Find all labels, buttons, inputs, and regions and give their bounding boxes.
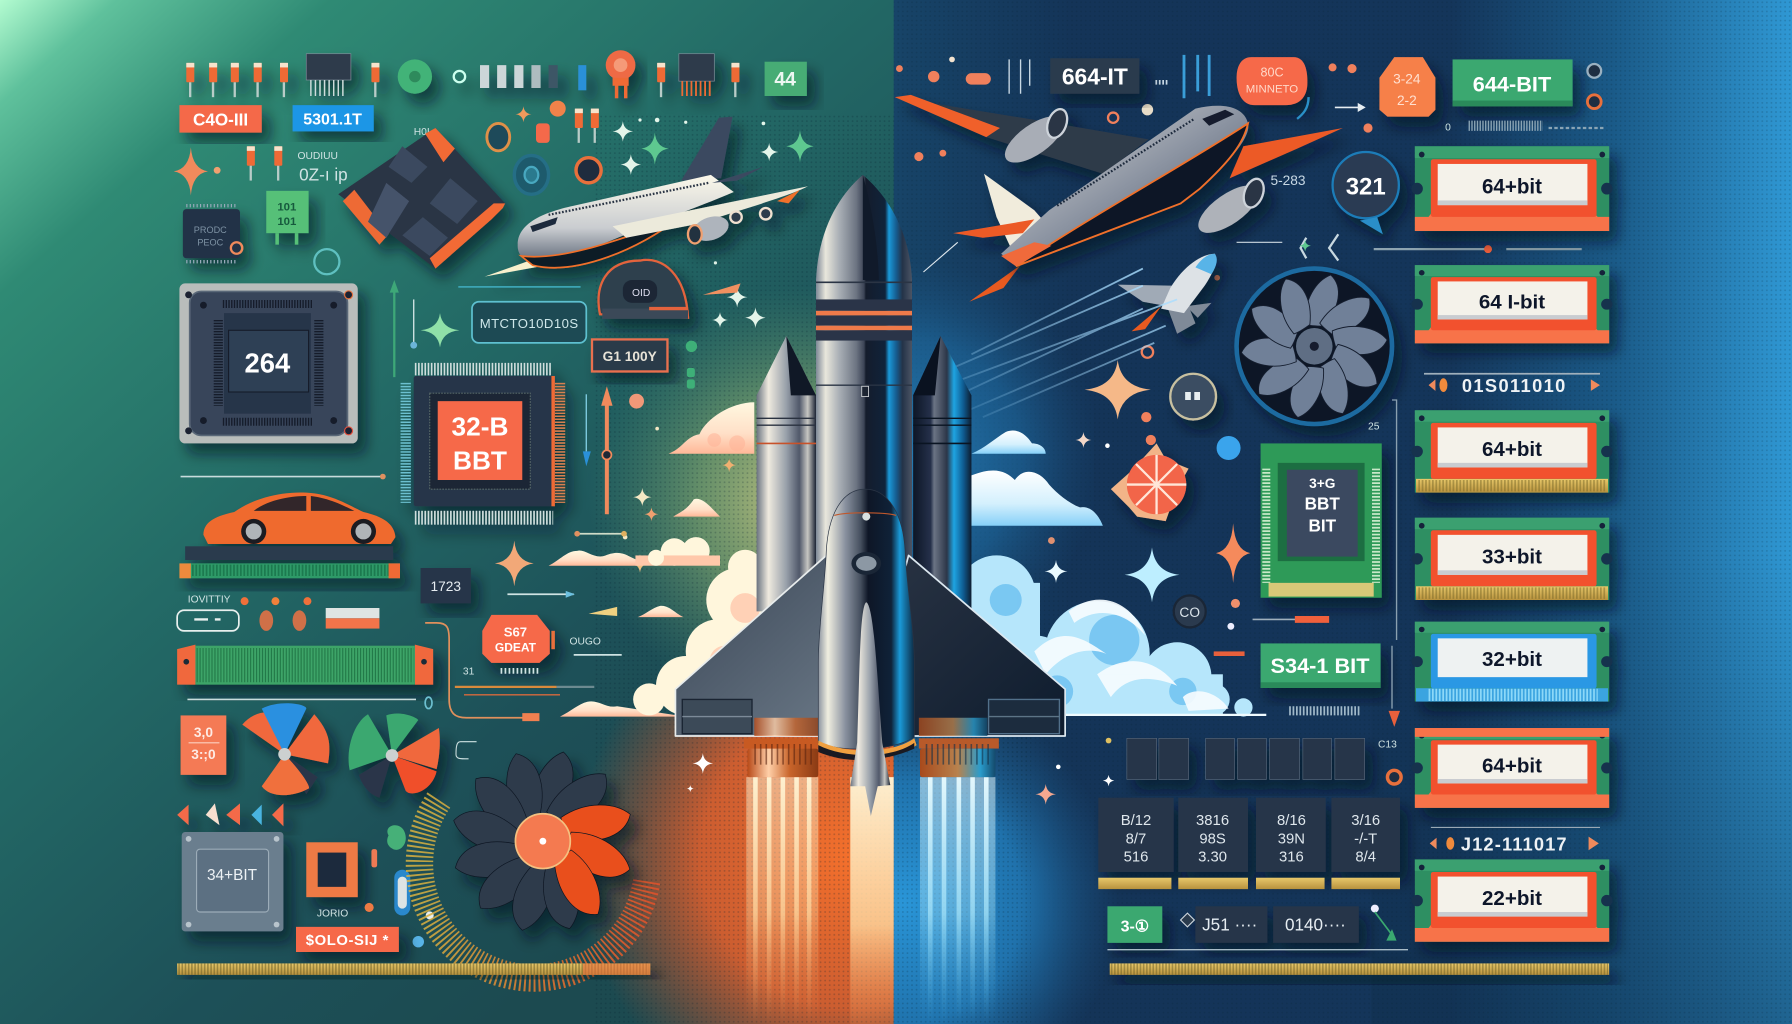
green chip 101: 101 xyxy=(277,201,297,213)
gold contacts xyxy=(1098,878,1400,889)
green square label 44: 44 xyxy=(774,69,796,91)
orange shard xyxy=(703,283,741,295)
RAM module 3: 64+bit xyxy=(1482,438,1542,461)
coral label 3-24 xyxy=(1379,57,1435,117)
center tail fin xyxy=(850,602,890,816)
coral label xyxy=(296,927,399,952)
circle 321 with speech tail xyxy=(1333,152,1399,234)
coral box: 3:;0 xyxy=(191,747,216,762)
label 664-IT: 664-IT xyxy=(1062,64,1128,90)
airplane right xyxy=(895,95,1343,266)
row of pill and dots: IOVITTIY xyxy=(188,594,231,605)
left nozzle xyxy=(744,738,821,777)
RAM module 2: 64 I-bit xyxy=(1479,292,1545,313)
small resistors xyxy=(247,146,282,181)
numeric memory blocks xyxy=(1098,798,1400,889)
green label 644-BIT: 644-BIT xyxy=(1473,71,1552,96)
dark labels: 0140···· xyxy=(1285,914,1346,934)
chip 1723: 1723 xyxy=(430,579,461,594)
rings xyxy=(1335,64,1606,133)
green square label 44 xyxy=(765,62,807,96)
large green RAM stick xyxy=(177,645,433,685)
gray chip 34+BIT: 34+BIT xyxy=(207,867,258,884)
top row of resistors and chips xyxy=(186,54,739,97)
flames xyxy=(746,777,995,1024)
blue ball xyxy=(1217,436,1241,460)
circle 321 with speech tail: 321 xyxy=(1346,173,1386,200)
RAM module 6 xyxy=(1411,728,1613,808)
coral speech bubble 80C: 80C xyxy=(1260,66,1284,80)
block 4: 3/16 xyxy=(1351,813,1380,829)
right clouds xyxy=(958,431,1266,717)
dash and connector: C13 xyxy=(1378,739,1397,750)
blue glow under the right side of the rocket xyxy=(894,257,1122,1024)
left panel: computing components xyxy=(174,50,814,978)
gray chip 34+BIT xyxy=(182,832,283,931)
binary label 2 xyxy=(1430,827,1600,854)
small text 5-283: 5-283 xyxy=(1270,173,1306,188)
small shuttle xyxy=(1118,254,1217,334)
left wing xyxy=(675,555,869,736)
coral speech bubble 80C xyxy=(1237,57,1309,119)
block 4: -/-T xyxy=(1354,831,1377,847)
RAM module 1: 64+bit xyxy=(1482,175,1542,198)
coral box: 3,0 xyxy=(194,725,213,740)
RAM module 7: 22+bit xyxy=(1482,887,1542,910)
icon: small fan 2 xyxy=(349,714,440,798)
RAM module 5: 32+bit xyxy=(1482,649,1542,671)
coral label: $OLO-SIJ * xyxy=(306,933,389,949)
coral label 3-24: 3-24 xyxy=(1393,71,1421,86)
small tiny text labels xyxy=(297,127,430,185)
binary label: 01S011010 xyxy=(1462,375,1567,396)
large metal CPU 264 xyxy=(179,283,358,443)
small dark chip: PRODC xyxy=(194,225,227,235)
dark labels: J51 ···· xyxy=(1202,914,1257,934)
parts near mini chip: JORIO xyxy=(317,909,348,920)
left cloud peach shading xyxy=(680,433,763,714)
RAM module 4: 33+bit xyxy=(1482,545,1542,568)
clouds behind the rocket xyxy=(549,402,1266,717)
binary label xyxy=(1424,374,1600,396)
right booster xyxy=(913,336,971,611)
circled CO and parts xyxy=(1174,595,1329,630)
blue label xyxy=(293,105,374,131)
green label 644-BIT xyxy=(1453,59,1573,106)
left clouds xyxy=(549,402,784,717)
circled CO and parts: CO xyxy=(1179,605,1200,620)
label 664-IT xyxy=(1050,58,1139,94)
airplane left xyxy=(485,117,808,277)
round button xyxy=(1170,374,1216,419)
green chip 101 xyxy=(266,191,309,245)
central processor 32-B: 32-B xyxy=(452,411,508,441)
small dark chip: PEOC xyxy=(197,238,224,248)
small space stars left xyxy=(623,427,736,792)
small stars right xyxy=(1035,432,1250,841)
block 3 xyxy=(1256,798,1326,872)
right panel: computing components xyxy=(895,55,1613,975)
RAM module 7 xyxy=(1411,859,1613,942)
car plinth and green strip xyxy=(179,546,400,578)
car xyxy=(203,492,395,544)
green chip 101: 101 xyxy=(277,216,297,228)
small wire xyxy=(507,591,617,616)
green small label: 3-① xyxy=(1121,918,1149,935)
thin vertical arrows xyxy=(390,280,581,377)
main rocket body xyxy=(816,175,912,571)
nozzles xyxy=(744,738,999,777)
block 3: 39N xyxy=(1278,831,1305,847)
small text next to badge: OUGO xyxy=(569,637,601,648)
dash and connector: 25 xyxy=(1368,422,1380,433)
row of pill and dots xyxy=(177,594,379,631)
dark cloud device xyxy=(599,260,688,319)
orange sunburst xyxy=(1111,443,1189,521)
right wing xyxy=(869,555,1065,736)
block 4 xyxy=(1331,798,1400,872)
block 2: 98S xyxy=(1199,831,1226,847)
central processor 32-B xyxy=(406,369,560,518)
row of memory chips xyxy=(1127,738,1365,779)
green circuit chip board: BIT xyxy=(1308,515,1337,535)
green capacitors xyxy=(686,341,697,389)
RAM module 2 xyxy=(1411,265,1613,343)
orange label xyxy=(179,105,262,133)
rings: 0 xyxy=(1445,122,1451,133)
coral box xyxy=(181,715,226,775)
right nozzle xyxy=(919,738,999,777)
orange four-point star xyxy=(1085,360,1151,419)
block 2: 3.30 xyxy=(1198,850,1227,866)
exhaust trails xyxy=(923,242,1177,417)
block 3: 316 xyxy=(1279,850,1304,866)
RAM module 1 xyxy=(1411,146,1613,231)
green label S34-1 BIT xyxy=(1261,643,1381,688)
ring xyxy=(314,249,339,274)
pin probe xyxy=(1371,905,1397,941)
coral label 3-24: 2-2 xyxy=(1397,93,1417,108)
dash and connector xyxy=(1214,400,1401,784)
badge S67 GDEAT xyxy=(482,615,553,663)
block 1: 8/7 xyxy=(1126,831,1146,847)
block 2: 3816 xyxy=(1196,813,1229,829)
blue label: 5301.1T xyxy=(303,112,362,129)
left booster xyxy=(757,336,816,611)
scattered dots xyxy=(896,57,1373,445)
label MTCTO10D10S: MTCTO10D10S xyxy=(480,316,579,331)
dark cloud device: ОID xyxy=(632,288,650,299)
orange star lower xyxy=(495,541,534,586)
bottom line and gold bar xyxy=(1107,950,1609,975)
left flame xyxy=(746,777,818,1024)
binary label 2: J12-111017 xyxy=(1461,833,1568,854)
icon: small fan 1 xyxy=(242,703,329,795)
row of small arrows xyxy=(177,803,283,826)
parts near mini chip xyxy=(317,825,434,947)
wire to orange connector xyxy=(187,623,539,759)
badge S67 GDEAT: S67 xyxy=(504,625,527,640)
right cloud highlight xyxy=(990,584,1229,711)
connector line xyxy=(181,474,627,537)
green small label xyxy=(1107,906,1162,943)
RAM module 5 xyxy=(1411,622,1613,702)
block 1 xyxy=(1098,798,1174,872)
RAM module 3 xyxy=(1411,410,1613,493)
rocket: shuttle with boosters and flames xyxy=(675,175,1065,1024)
right flame xyxy=(920,777,995,1024)
label G1 100Y xyxy=(592,339,667,371)
green circuit chip board xyxy=(1261,443,1382,598)
badge S67 GDEAT: GDEAT xyxy=(495,640,537,654)
block 3: 8/16 xyxy=(1277,813,1306,829)
central processor 32-B: BBT xyxy=(453,446,507,476)
antenna ticks xyxy=(1009,55,1209,98)
small tiny text labels: 0Z-ı ip xyxy=(299,165,348,185)
green circuit chip board: 3+G xyxy=(1309,476,1335,491)
block 2 xyxy=(1178,798,1248,872)
centre flame xyxy=(850,777,894,1024)
slider arrows xyxy=(583,386,644,514)
block 1: B/12 xyxy=(1121,813,1151,829)
label MTCTO10D10S xyxy=(472,302,586,343)
decorative stars xyxy=(421,118,814,347)
large metal CPU 264: 264 xyxy=(245,348,291,379)
slider lines xyxy=(1237,234,1582,261)
rings and capacitors xyxy=(487,101,601,194)
icon: orange badge component xyxy=(606,50,635,98)
small tiny text labels: OUDIUU xyxy=(297,151,338,162)
coral speech bubble 80C: MINNETO xyxy=(1246,84,1298,96)
RAM module 4 xyxy=(1411,518,1613,600)
shuttle body xyxy=(818,489,917,760)
small text next to badge xyxy=(455,637,622,695)
icon: cooling fan right xyxy=(1237,269,1392,424)
green label S34-1 BIT: S34-1 BIT xyxy=(1271,653,1370,678)
small text next to badge: 31 xyxy=(463,666,475,677)
green circuit chip board: BBT xyxy=(1305,494,1340,514)
block 1: 516 xyxy=(1124,850,1148,866)
motherboard diamond module xyxy=(338,128,505,269)
dark labels xyxy=(1181,906,1359,943)
icon: orange star xyxy=(174,147,221,195)
small tiny text labels: H0I xyxy=(414,127,430,138)
orange label: C4O-III xyxy=(193,110,248,130)
RAM module 6: 64+bit xyxy=(1482,756,1542,777)
small dark chip xyxy=(183,206,242,262)
block 4: 8/4 xyxy=(1355,850,1376,866)
orange mini chip xyxy=(306,842,358,897)
big fan with halftone ring xyxy=(419,749,647,978)
lower gold connector bar xyxy=(177,963,650,975)
chip 1723 xyxy=(421,568,471,603)
label G1 100Y: G1 100Y xyxy=(603,349,657,364)
